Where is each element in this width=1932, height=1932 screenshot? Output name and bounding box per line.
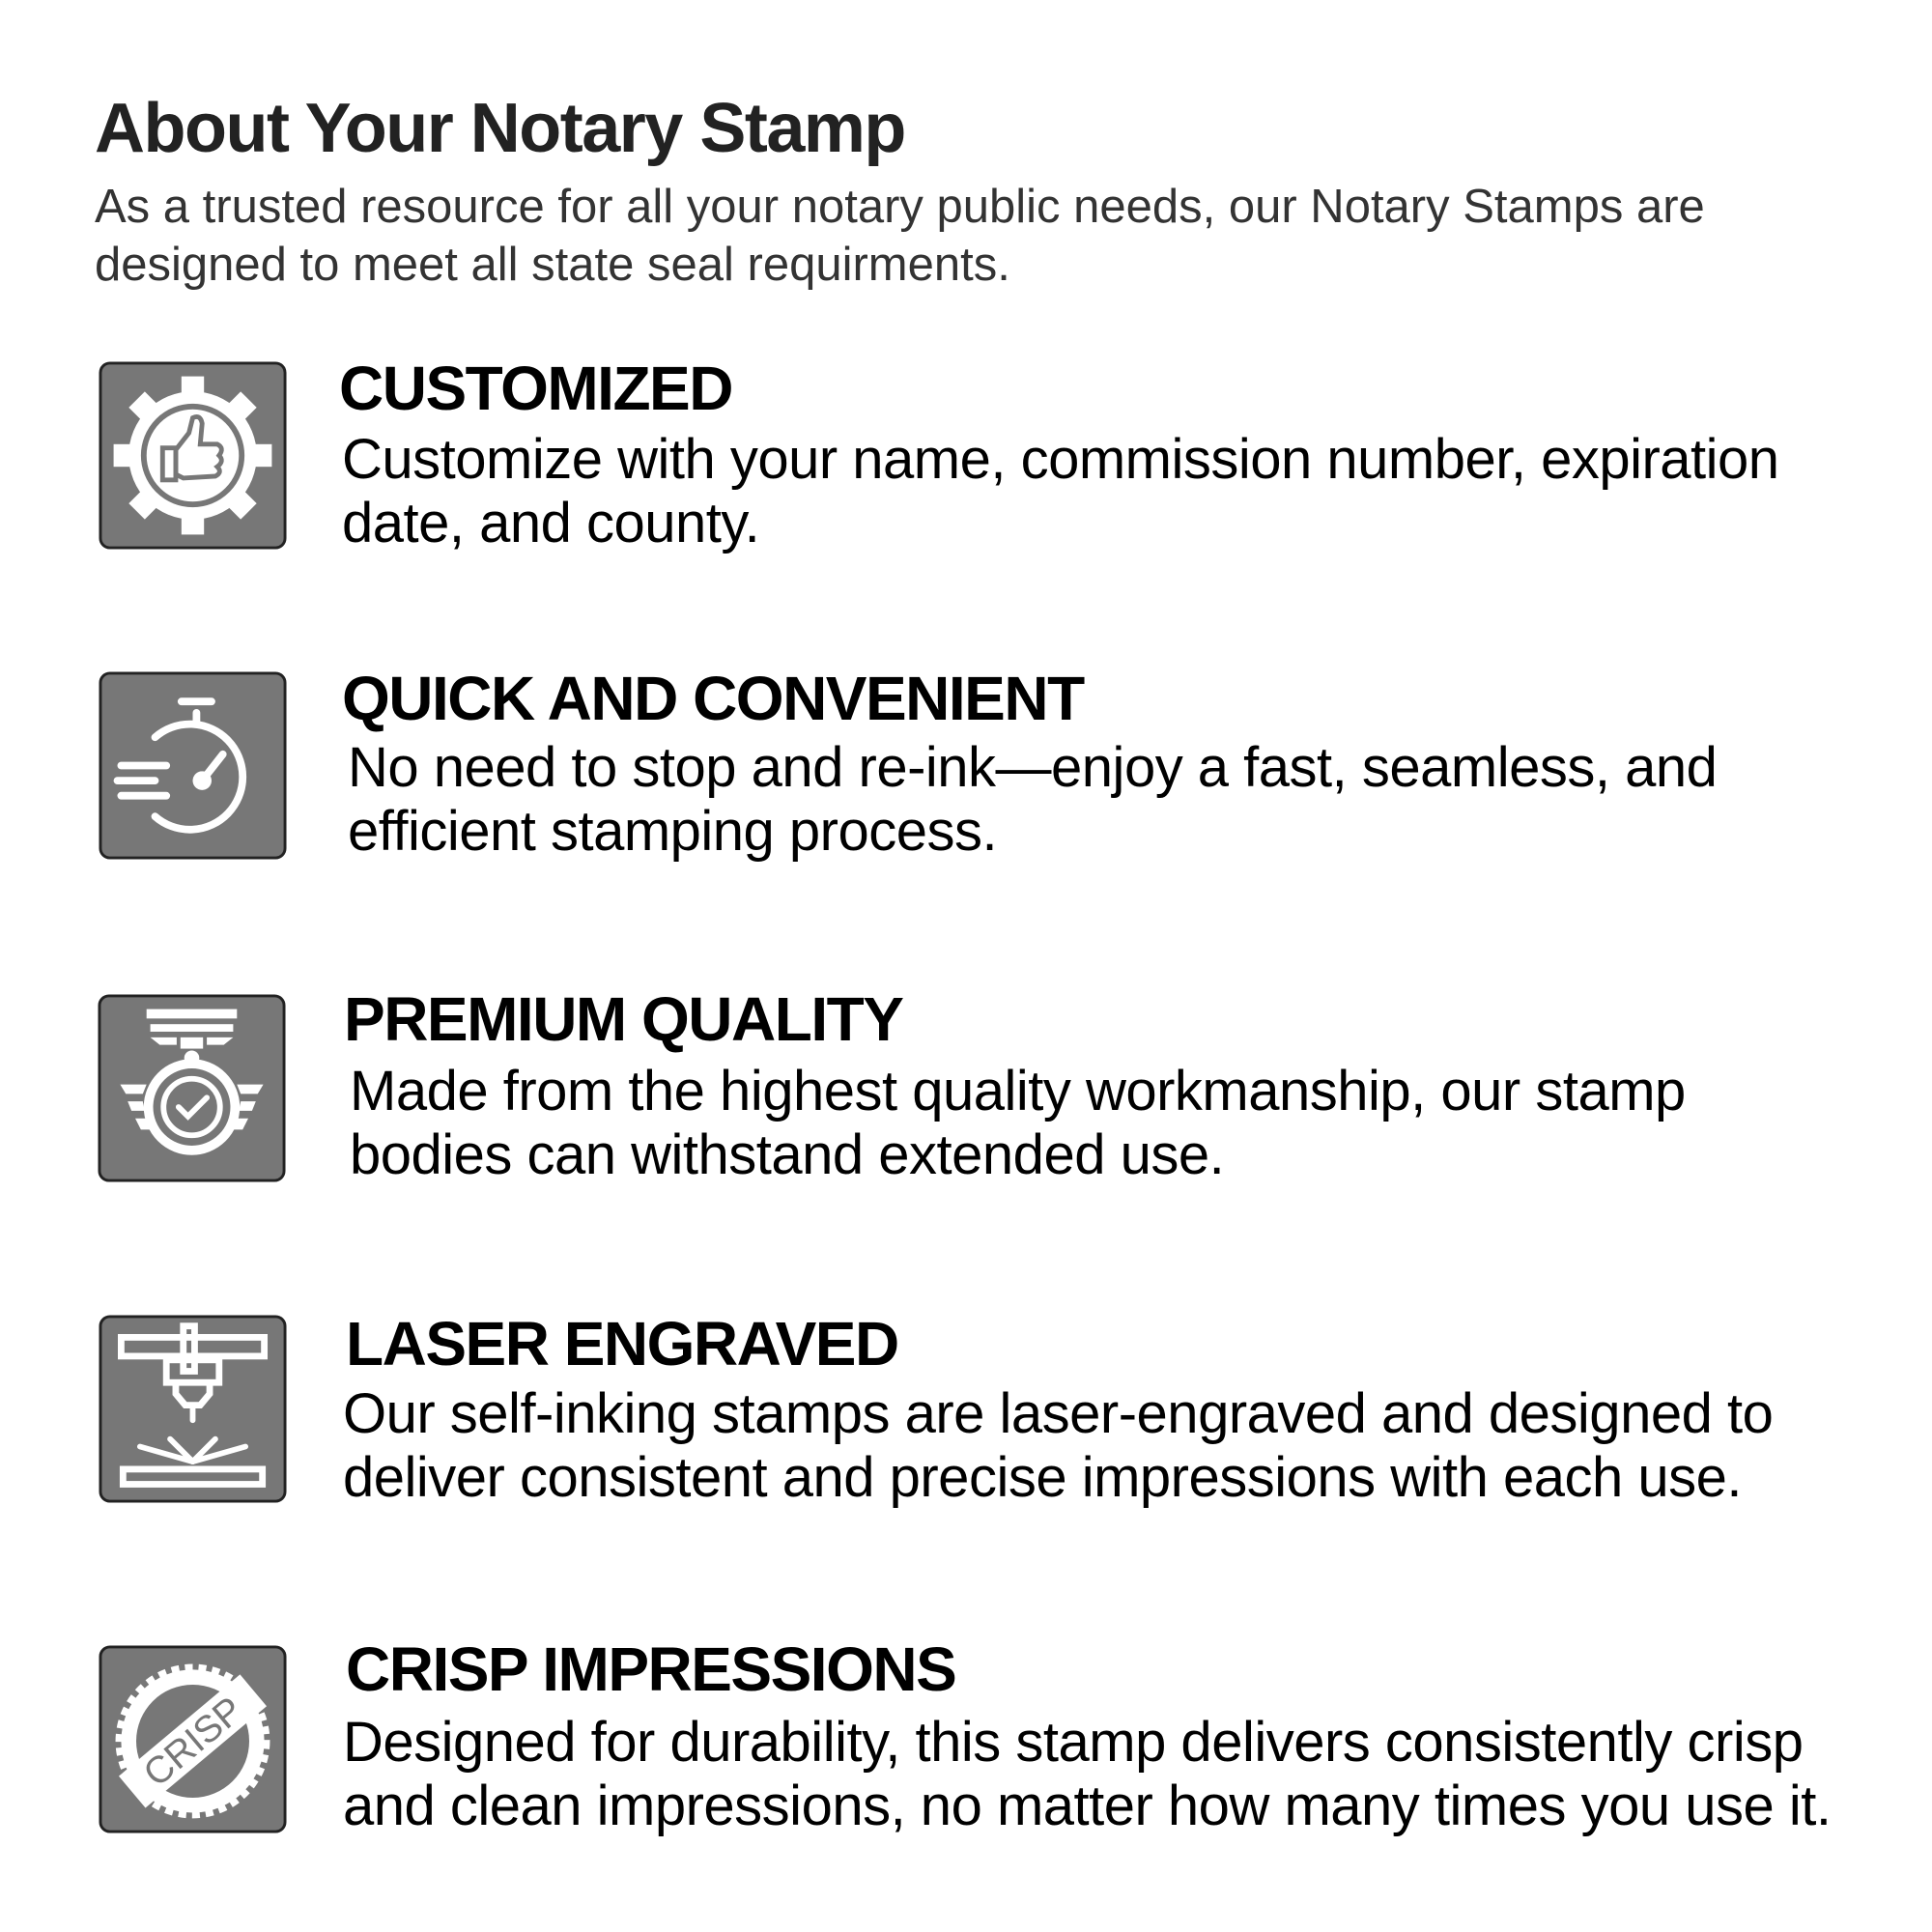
text: laser: Our self-inking stamps are laser-engraved and designed to (343, 1382, 1773, 1445)
text: quick: No need to stop and re-ink—enjoy a fast, seamless, and (348, 736, 1717, 799)
text: crisp: and clean impressions, no matter how many times you use it. (343, 1775, 1831, 1837)
text: quick: efficient stamping process. (348, 800, 997, 863)
heading: crisp: CRISP IMPRESSIONS (346, 1634, 955, 1704)
icon: crisp seal (99, 1646, 286, 1833)
heading: customized: CUSTOMIZED (339, 354, 732, 423)
subtitle: designed to meet all state seal requirments. (95, 239, 1010, 291)
heading: laser: LASER ENGRAVED (346, 1309, 898, 1378)
icon: gear thumbs up (99, 361, 286, 549)
heading: quick: QUICK AND CONVENIENT (342, 664, 1084, 733)
icon: laser engraver (99, 1316, 286, 1503)
text: premium: bodies can withstand extended use. (350, 1123, 1224, 1186)
icon: stopwatch (99, 672, 286, 860)
subtitle (95, 181, 1705, 291)
text: quick (348, 736, 1717, 863)
heading: premium: PREMIUM QUALITY (344, 984, 902, 1054)
text: customized (342, 428, 1779, 554)
icon: medal (99, 995, 286, 1182)
subtitle: As a trusted resource for all your notary public needs, our Notary Stamps are (95, 181, 1705, 233)
text: customized: Customize with your name, commission number, expiration (342, 428, 1779, 491)
text: crisp: Designed for durability, this stamp delivers consistently crisp (343, 1711, 1804, 1774)
text: premium (350, 1060, 1686, 1186)
icon: crisp seal: CRISP (136, 1690, 251, 1795)
text: premium: Made from the highest quality workmanship, our stamp (350, 1060, 1686, 1122)
title: About Your Notary Stamp (95, 90, 905, 167)
text: laser: deliver consistent and precise impressions with each use. (343, 1446, 1742, 1509)
text: laser (343, 1382, 1773, 1509)
text: customized: date, and county. (342, 492, 759, 554)
text: crisp (343, 1711, 1831, 1837)
